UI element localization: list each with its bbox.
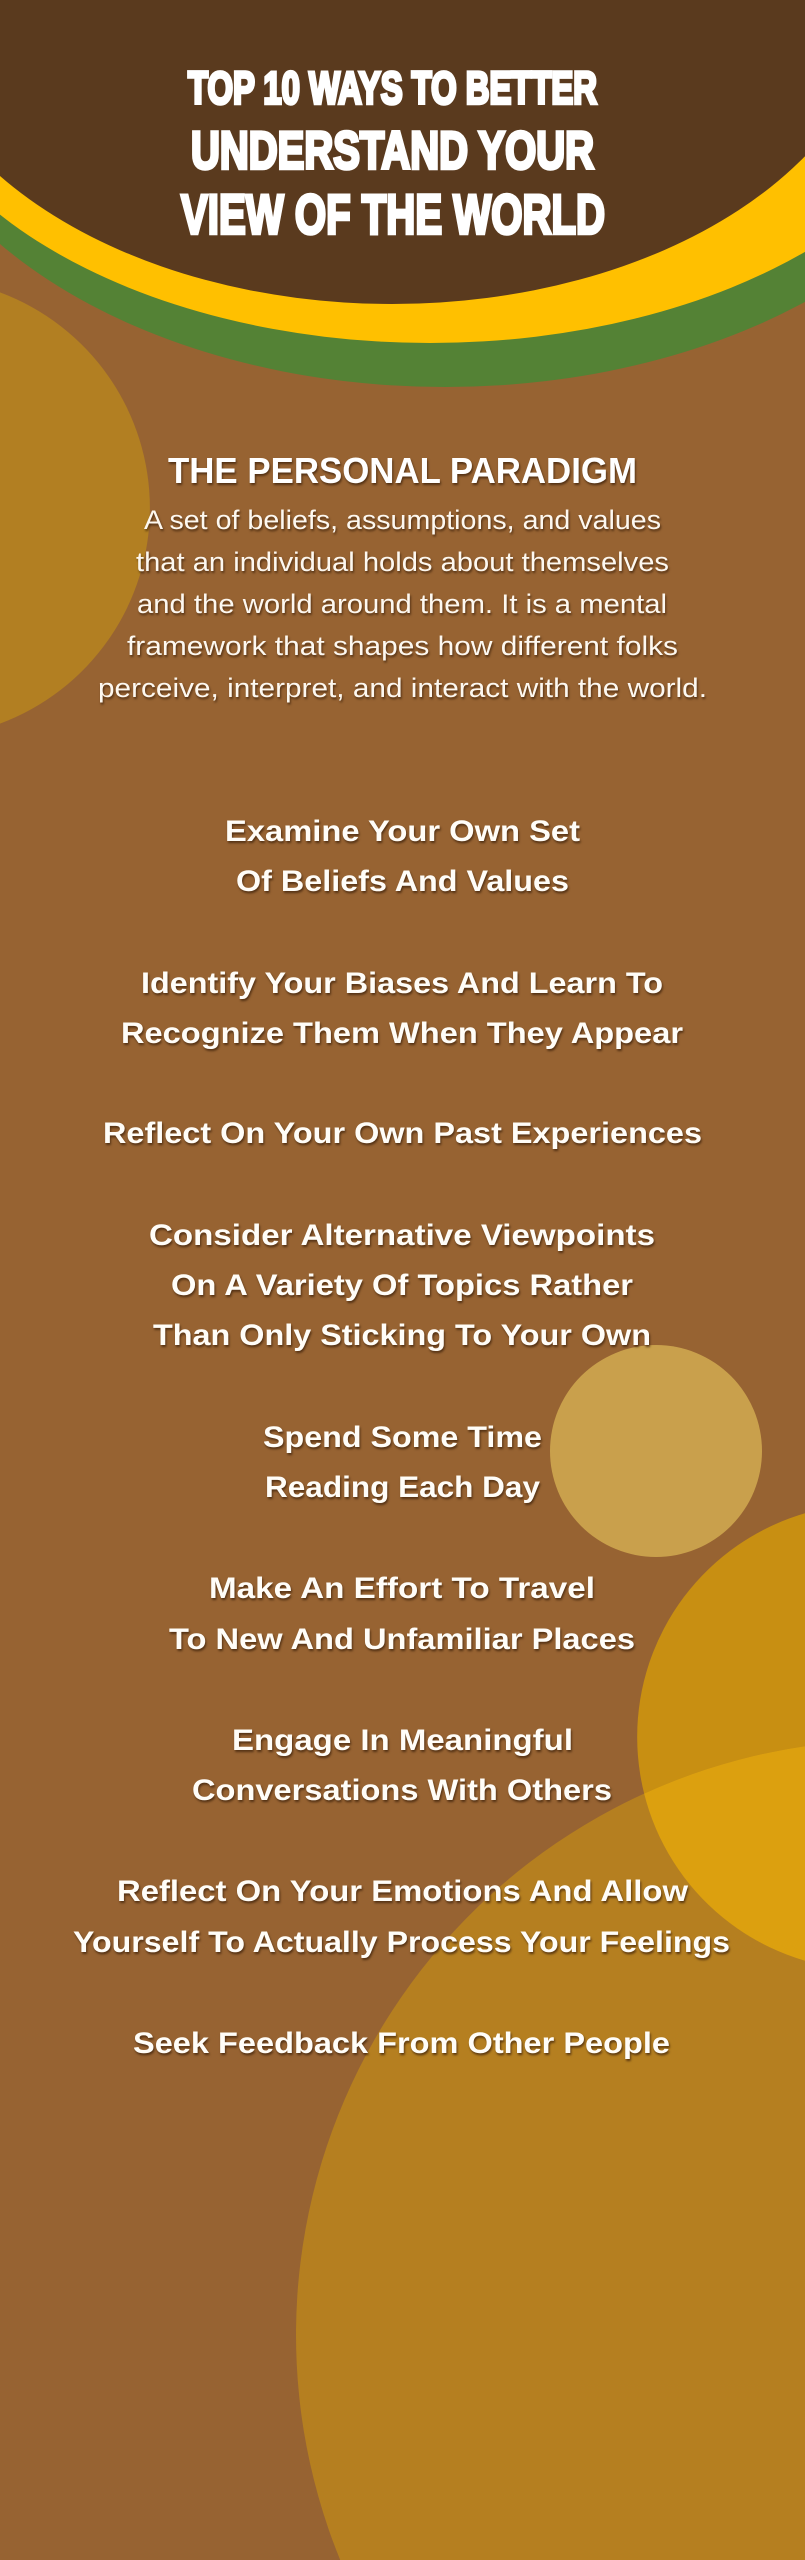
decorative circle: small tan <box>550 1345 762 1557</box>
item: examine beliefs: Of Beliefs And Values <box>236 865 569 898</box>
item: alternative viewpoints: Consider Alternative Viewpoints <box>149 1219 655 1252</box>
heading: the personal paradigm: THE PERSONAL PARADIGM <box>168 450 637 491</box>
item: alternative viewpoints: On A Variety Of Topics Rather <box>171 1269 633 1302</box>
decorative circle: upper left <box>0 292 150 724</box>
header top fill <box>0 0 805 100</box>
item: reading: Spend Some Time <box>263 1421 542 1454</box>
item: emotions <box>73 1875 730 1959</box>
item: identify biases: Recognize Them When They Appear <box>121 1017 683 1050</box>
item: identify biases: Identify Your Biases And Learn To <box>141 967 663 1000</box>
item: identify biases <box>121 967 683 1050</box>
item: conversations: Conversations With Others <box>192 1774 612 1807</box>
title <box>181 62 605 246</box>
item: examine beliefs: Examine Your Own Set <box>225 815 580 848</box>
decorative circle: large bottom right <box>296 1746 805 2560</box>
definition text: and the world around them. It is a mental <box>137 589 667 619</box>
item: alternative viewpoints <box>149 1219 655 1352</box>
header band: green arc <box>0 0 805 387</box>
title: TOP 10 WAYS TO BETTER <box>188 62 597 114</box>
item: examine beliefs <box>225 815 580 898</box>
item: emotions: Yourself To Actually Process Your Feelings <box>73 1926 730 1959</box>
item: reflect on past: Reflect On Your Own Past Experiences <box>103 1117 702 1150</box>
item: conversations <box>192 1724 612 1807</box>
item: alternative viewpoints: Than Only Sticking To Your Own <box>153 1319 651 1352</box>
item: travel: Make An Effort To Travel <box>209 1572 595 1605</box>
header band: yellow arc <box>0 0 805 343</box>
item: reading <box>263 1421 542 1504</box>
decorative circle: right <box>637 1513 805 1961</box>
item: emotions: Reflect On Your Emotions And Allow <box>117 1875 689 1908</box>
decorative circle overlap <box>644 1746 805 1961</box>
definition text: A set of beliefs, assumptions, and values <box>144 505 661 535</box>
item: travel <box>169 1572 635 1656</box>
item: reading: Reading Each Day <box>265 1471 540 1504</box>
header band: dark brown <box>0 0 805 304</box>
list of ways <box>73 815 730 2060</box>
item: conversations: Engage In Meaningful <box>232 1724 573 1757</box>
definition text <box>98 505 707 703</box>
definition text: framework that shapes how different folks <box>127 631 678 661</box>
definition text: perceive, interpret, and interact with the world. <box>98 673 707 703</box>
definition text: that an individual holds about themselves <box>136 547 669 577</box>
item: travel: To New And Unfamiliar Places <box>169 1623 635 1656</box>
item: feedback: Seek Feedback From Other People <box>133 2027 670 2060</box>
title: UNDERSTAND YOUR <box>191 122 594 180</box>
title: VIEW OF THE WORLD <box>181 182 605 246</box>
